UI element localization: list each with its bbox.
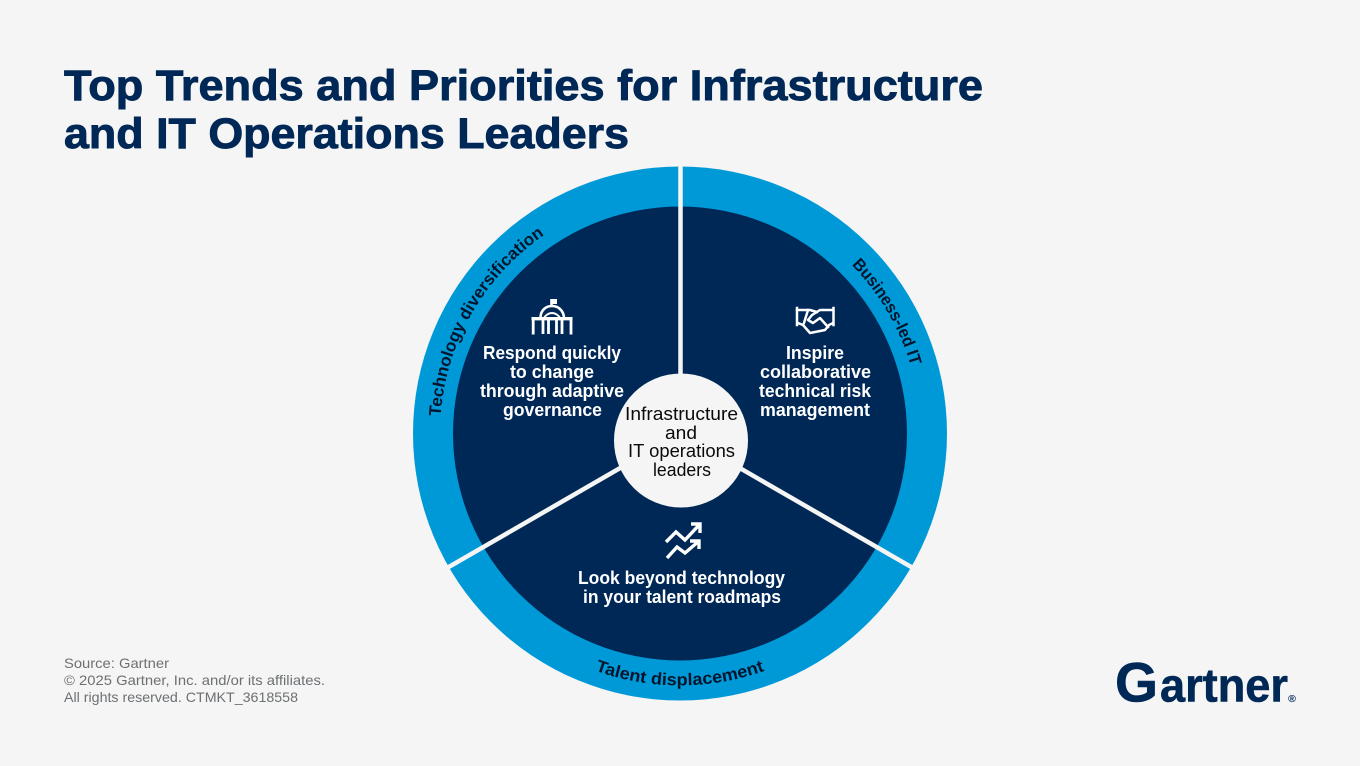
icon: rising trend arrows: [666, 524, 700, 558]
sector text: technical risk management: [759, 343, 872, 420]
circular diagram: [413, 166, 947, 700]
sector text: talent roadmaps: Look beyond technology: [578, 568, 785, 588]
source and copyright note: © 2025 Gartner, Inc. and/or its affiliates.: [64, 672, 325, 688]
title: [64, 62, 983, 158]
center label: leaders: [653, 460, 711, 480]
title: and IT Operations Leaders: [64, 110, 629, 158]
ring label: Business-led IT: Business-led IT: [852, 258, 922, 363]
sector text: adaptive governance: [480, 343, 624, 420]
center label: and: [665, 423, 697, 443]
outer ring: [413, 166, 947, 700]
sector text: talent roadmaps: in your talent roadmaps: [583, 587, 781, 607]
center circle: [614, 374, 748, 508]
title: Top Trends and Priorities for Infrastructure: [64, 62, 983, 110]
inner navy disc: [453, 206, 907, 660]
sector text: technical risk management: management: [760, 400, 870, 420]
source and copyright note: All rights reserved. CTMKT_3618558: [64, 689, 298, 705]
sector text: talent roadmaps: [578, 568, 785, 607]
source and copyright note: [64, 655, 325, 705]
sector text: adaptive governance: Respond quickly: [483, 343, 621, 363]
Gartner logo: G: [1115, 650, 1158, 714]
sector text: technical risk management: Inspire: [786, 343, 844, 363]
Gartner logo: artner: [1160, 658, 1288, 712]
ring label: Technology diversification: Technology diversification: [428, 229, 544, 416]
center label: IT operations: [628, 441, 735, 461]
ring label: Talent displacement: Talent displacement: [598, 660, 764, 689]
center label: [625, 404, 738, 480]
icon: handshake: [797, 308, 834, 333]
sector text: technical risk management: collaborative: [760, 362, 871, 382]
sector text: adaptive governance: through adaptive: [480, 381, 624, 401]
center label: Infrastructure: [625, 404, 738, 424]
Gartner logo: [1115, 650, 1297, 714]
sector text: adaptive governance: governance: [503, 400, 602, 420]
source and copyright note: Source: Gartner: [64, 655, 169, 671]
Gartner logo: ®: [1288, 694, 1297, 705]
sector text: adaptive governance: to change: [510, 362, 594, 382]
sector text: technical risk management: technical risk: [759, 381, 872, 401]
white spokes dividing the three sectors: [446, 160, 914, 569]
icon: government building: [532, 299, 572, 334]
